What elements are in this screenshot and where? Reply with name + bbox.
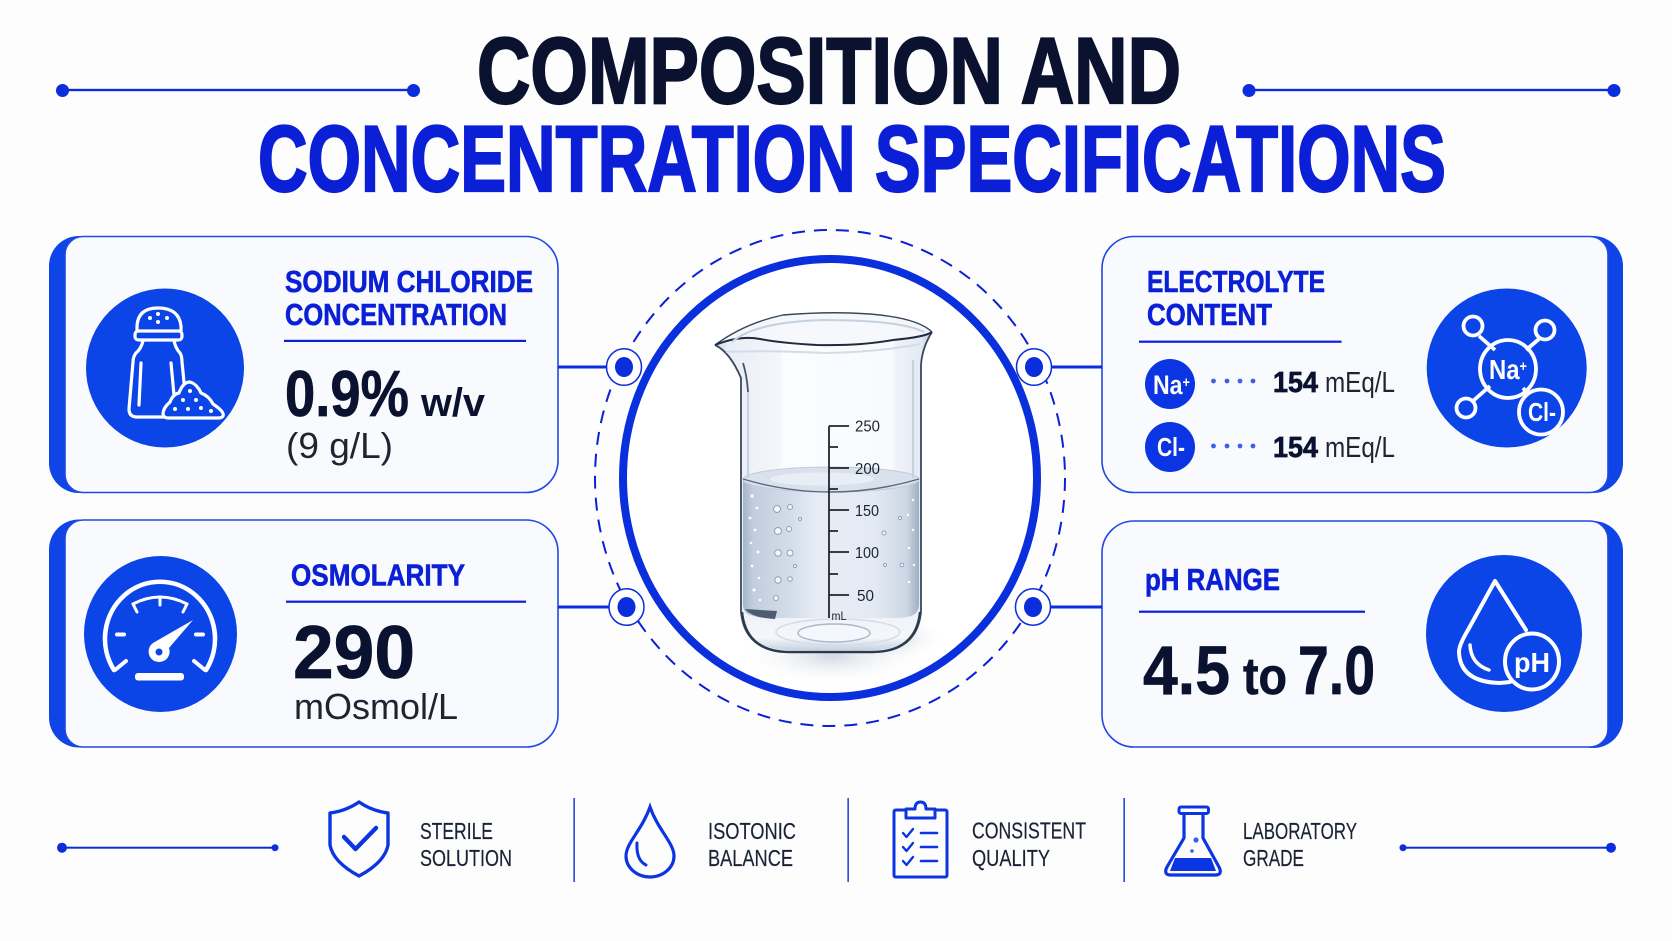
icon: molecule: Na bbox=[1489, 354, 1525, 385]
connector: top right bbox=[1016, 349, 1102, 385]
sparkles bbox=[749, 494, 915, 601]
footer item: consistent quality: CONSISTENT bbox=[972, 818, 1086, 844]
beaker scale labels: 50 bbox=[857, 588, 874, 605]
icon: clipboard bbox=[894, 802, 947, 877]
beaker scale labels: 200 bbox=[855, 461, 880, 478]
value: w/v bbox=[420, 381, 486, 425]
footer item: laboratory grade: GRADE bbox=[1243, 845, 1304, 871]
connector: bottom right bbox=[1016, 589, 1102, 625]
footer item: sterile solution: SOLUTION bbox=[420, 845, 512, 871]
value: 4.5 bbox=[1143, 632, 1230, 709]
dashed outer ring bbox=[595, 230, 1065, 726]
value bbox=[1143, 632, 1375, 709]
water bbox=[743, 479, 919, 618]
beaker scale labels bbox=[832, 418, 880, 623]
central ring bbox=[623, 259, 1037, 697]
beaker rim bbox=[715, 313, 932, 345]
icon: shield bbox=[330, 802, 388, 876]
footer item: laboratory grade: LABORATORY bbox=[1243, 818, 1357, 844]
panel: pH range bbox=[1102, 521, 1623, 748]
beaker base bbox=[742, 610, 920, 650]
value bbox=[285, 357, 486, 466]
footer item: sterile solution bbox=[330, 802, 512, 876]
row: sodium: 154 bbox=[1273, 367, 1318, 399]
footer item: isotonic balance: BALANCE bbox=[708, 845, 793, 871]
footer item: sterile solution: STERILE bbox=[420, 818, 493, 844]
beaker scale labels: 100 bbox=[855, 545, 879, 562]
footer ornament: left line bbox=[57, 843, 278, 853]
value: mOsmol/L bbox=[294, 686, 458, 727]
icon: molecule: Cl- bbox=[1528, 397, 1556, 427]
icon: water drop bbox=[626, 807, 674, 877]
heading: SODIUM CHLORIDE bbox=[285, 264, 533, 299]
beaker scale labels: 250 bbox=[855, 418, 880, 436]
beaker scale bbox=[829, 426, 849, 618]
beaker illustration bbox=[715, 313, 947, 686]
value: (9 g/L) bbox=[286, 425, 393, 466]
value: to bbox=[1243, 648, 1287, 706]
value: 290 bbox=[293, 610, 415, 694]
row: chloride: mEq/L bbox=[1325, 432, 1395, 464]
value: 7.0 bbox=[1298, 632, 1375, 709]
panel: sodium chloride concentration bbox=[49, 236, 558, 493]
row: chloride: Cl- bbox=[1157, 432, 1185, 462]
icon: molecule: + bbox=[1520, 358, 1527, 375]
row: sodium bbox=[1145, 359, 1395, 409]
connector: top left bbox=[558, 349, 642, 385]
heading: pH RANGE bbox=[1145, 562, 1280, 597]
panel: electrolyte content bbox=[1102, 236, 1623, 493]
title: COMPOSITION AND bbox=[477, 18, 1181, 123]
heading bbox=[285, 264, 533, 332]
beaker reflection and shadow bbox=[734, 614, 947, 686]
row: sodium: mEq/L bbox=[1325, 367, 1395, 399]
footer item: consistent quality bbox=[894, 802, 1086, 877]
title ornament: left line bbox=[56, 84, 420, 97]
row: sodium: Na bbox=[1153, 370, 1188, 400]
beaker scale labels: mL bbox=[832, 611, 847, 623]
row: chloride: 154 bbox=[1273, 432, 1318, 464]
footer item: consistent quality: QUALITY bbox=[972, 845, 1050, 871]
footer item: laboratory grade bbox=[1166, 807, 1357, 875]
heading: OSMOLARITY bbox=[291, 558, 465, 592]
title ornament: right line bbox=[1242, 84, 1620, 97]
beaker outline bbox=[715, 332, 932, 652]
icon: pH drop: pH bbox=[1514, 647, 1550, 678]
footer item: isotonic balance: ISOTONIC bbox=[708, 818, 796, 844]
row: sodium: + bbox=[1183, 374, 1190, 391]
footer ornament: right line bbox=[1400, 843, 1616, 853]
heading: ELECTROLYTE bbox=[1147, 264, 1325, 299]
icon: pH drop bbox=[1426, 555, 1582, 712]
title bbox=[258, 18, 1446, 211]
value bbox=[293, 610, 458, 727]
icon: gauge bbox=[84, 556, 237, 712]
footer item: isotonic balance bbox=[626, 807, 796, 877]
panel: osmolarity bbox=[49, 520, 558, 748]
icon: flask bbox=[1166, 807, 1220, 875]
value: 0.9% bbox=[285, 357, 409, 430]
beaker scale labels: 150 bbox=[855, 503, 879, 520]
icon: molecule bbox=[1427, 288, 1587, 448]
row: chloride bbox=[1145, 422, 1395, 472]
icon: salt shaker bbox=[86, 288, 244, 448]
heading: CONTENT bbox=[1147, 297, 1272, 332]
heading: CONCENTRATION bbox=[285, 297, 507, 332]
connector: bottom left bbox=[558, 589, 644, 625]
beaker glass body bbox=[715, 313, 932, 652]
droplets bbox=[774, 504, 904, 600]
heading bbox=[1147, 264, 1325, 332]
